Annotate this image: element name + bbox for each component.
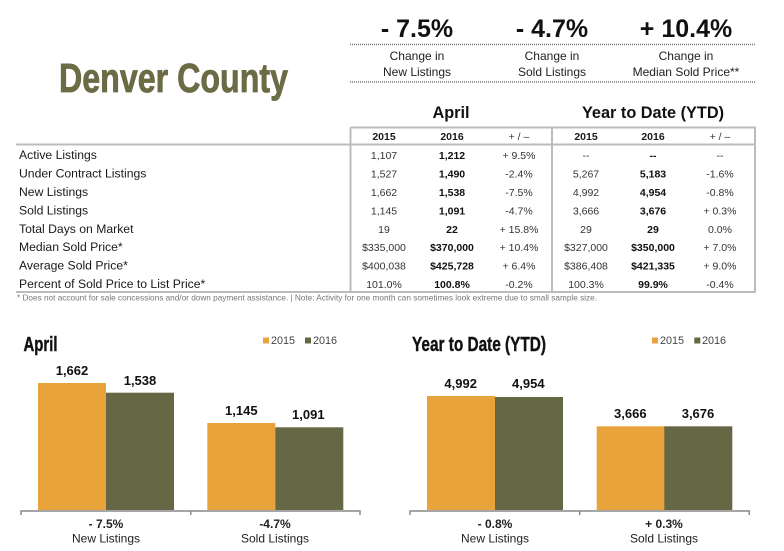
stat: median sold price change: Median Sold Price**	[633, 65, 740, 79]
row: New Listings: 1,662	[371, 187, 397, 199]
category label: Sold Listings	[630, 517, 698, 546]
category label: Sold Listings: Sold Listings	[241, 532, 309, 546]
category label: Sold Listings	[241, 517, 309, 546]
legend: 2016	[702, 335, 726, 347]
category label: New Listings: - 7.5%	[89, 517, 124, 531]
bars: New Listings	[427, 376, 563, 510]
legend	[263, 335, 337, 347]
row: Median Sold Price: Median Sold Price*	[19, 240, 123, 254]
heading: Year to Date table section: Year to Date (YTD)	[582, 104, 724, 122]
row: Under Contract Listings	[19, 166, 734, 180]
row: Median Sold Price: $370,000	[430, 242, 474, 254]
row: Average Sold Price: $386,408	[564, 260, 608, 272]
row: Total Days on Market: 22	[446, 224, 458, 236]
category label: Sold Listings: + 0.3%	[645, 517, 683, 531]
row: Active Listings: 1,212	[439, 150, 465, 162]
row: Total Days on Market	[19, 222, 732, 236]
row: New Listings	[19, 185, 734, 199]
stat: new listings change: Change in	[390, 49, 444, 63]
row: New Listings: 1,538	[439, 187, 465, 199]
bars: New Listings: 1,538	[124, 373, 156, 388]
row: Percent of Sold Price to List Price	[19, 277, 734, 291]
row: Average Sold Price: $400,038	[362, 260, 406, 272]
row: Total Days on Market: + 15.8%	[500, 224, 538, 236]
title: Denver County	[59, 55, 288, 101]
table header years: 2015	[372, 131, 396, 143]
panel: April bar chart	[21, 334, 360, 546]
row: Active Listings: Active Listings	[19, 148, 97, 162]
row: Sold Listings: 3,666	[573, 206, 599, 218]
row: Active Listings: --	[582, 150, 590, 162]
row: New Listings: -7.5%	[505, 187, 533, 199]
bars: New Listings	[38, 363, 174, 510]
row: Total Days on Market: 19	[378, 224, 390, 236]
row: Median Sold Price: $350,000	[631, 242, 675, 254]
row: Total Days on Market: 0.0%	[708, 224, 732, 236]
row: Total Days on Market: Total Days on Market	[19, 222, 134, 236]
row: Median Sold Price	[19, 240, 736, 254]
legend: 2015	[660, 335, 684, 347]
row: Average Sold Price: Average Sold Price*	[19, 258, 128, 272]
summary: key changes	[350, 15, 755, 82]
row: Active Listings: 1,107	[371, 150, 397, 162]
bars: Sold Listings: 3,666	[614, 406, 647, 421]
row: Sold Listings	[19, 204, 736, 218]
table header years: + / –	[509, 131, 530, 143]
row: Percent of Sold Price to List Price: -0.4%	[706, 279, 734, 291]
bars: New Listings: 4,992	[444, 376, 477, 391]
stat: new listings change: New Listings	[383, 65, 451, 79]
table header years: 2015	[574, 131, 598, 143]
row: Sold Listings: 1,091	[439, 206, 465, 218]
row: Sold Listings: Sold Listings	[19, 204, 88, 218]
legend	[652, 335, 726, 347]
bars: Sold Listings	[207, 403, 343, 510]
row: Percent of Sold Price to List Price: 100.3%	[568, 279, 604, 291]
panel: Year to Date bar chart	[410, 334, 749, 546]
row: Under Contract Listings: 5,183	[640, 168, 666, 180]
bars: Sold Listings: 1,145	[225, 403, 258, 418]
row: Sold Listings: -4.7%	[505, 206, 533, 218]
row: Median Sold Price: $327,000	[564, 242, 608, 254]
row: Percent of Sold Price to List Price: 99.9%	[638, 279, 669, 291]
row: Under Contract Listings: Under Contract Listings	[19, 166, 146, 180]
row: New Listings: 4,992	[573, 187, 599, 199]
stat: new listings change: - 7.5%	[381, 15, 453, 43]
bars: Sold Listings: 3,676	[682, 406, 714, 421]
bars: Sold Listings: 1,091	[292, 407, 325, 422]
row: Average Sold Price: $425,728	[430, 260, 474, 272]
row: Sold Listings: 3,676	[640, 206, 666, 218]
row: New Listings: -0.8%	[706, 187, 734, 199]
footnote: * Does not account for sale concessions and/or down payment assistance. | Note: Activity for one month can sometimes look extreme due to small sample size.	[17, 293, 597, 303]
bars: New Listings: 4,954	[512, 376, 545, 391]
category label: Sold Listings: Sold Listings	[630, 532, 698, 546]
row: Under Contract Listings: 5,267	[573, 168, 599, 180]
row: Percent of Sold Price to List Price: -0.2%	[505, 279, 533, 291]
row: Average Sold Price: $421,335	[631, 260, 675, 272]
row: Active Listings: + 9.5%	[503, 150, 535, 162]
legend: 2015	[271, 335, 295, 347]
row: Median Sold Price: + 10.4%	[500, 242, 538, 254]
row: Percent of Sold Price to List Price: Percent of Sold Price to List Price*	[19, 277, 206, 291]
row: Average Sold Price: + 9.0%	[704, 260, 736, 272]
row: Active Listings: --	[650, 150, 657, 162]
heading: April table section: April	[432, 104, 470, 122]
table header years: 2016	[440, 131, 464, 143]
row: Sold Listings: 1,145	[371, 206, 397, 218]
category label: New Listings	[461, 517, 529, 546]
table header years: 2016	[641, 131, 665, 143]
row: Percent of Sold Price to List Price: 101.0%	[366, 279, 402, 291]
stat: median sold price change	[633, 15, 740, 79]
row: Average Sold Price	[19, 258, 736, 272]
row: Percent of Sold Price to List Price: 100.8%	[434, 279, 470, 291]
stat: sold listings change: Sold Listings	[518, 65, 586, 79]
row: Median Sold Price: + 7.0%	[704, 242, 736, 254]
row: Total Days on Market: 29	[647, 224, 659, 236]
row: Under Contract Listings: 1,490	[439, 168, 465, 180]
bars: New Listings: 1,662	[56, 363, 88, 378]
row: New Listings: 4,954	[640, 187, 666, 199]
chart title: April: April	[24, 334, 58, 356]
legend: 2016	[313, 335, 337, 347]
row: Median Sold Price: $335,000	[362, 242, 406, 254]
table header years	[372, 131, 731, 143]
row: Active Listings	[19, 148, 724, 162]
stat: median sold price change: + 10.4%	[640, 15, 732, 43]
category label: New Listings	[72, 517, 140, 546]
table header years: + / –	[710, 131, 731, 143]
row: Total Days on Market: 29	[580, 224, 592, 236]
category label: Sold Listings: -4.7%	[259, 517, 291, 531]
bars: Sold Listings	[597, 406, 732, 510]
row: Under Contract Listings: 1,527	[371, 168, 397, 180]
stat: new listings change	[381, 15, 453, 79]
category label: New Listings: New Listings	[461, 532, 529, 546]
stat: sold listings change	[516, 15, 588, 79]
row: Average Sold Price: + 6.4%	[503, 260, 535, 272]
data table	[16, 128, 755, 292]
category label: New Listings: - 0.8%	[478, 517, 513, 531]
row: New Listings: New Listings	[19, 185, 88, 199]
stat: sold listings change: - 4.7%	[516, 15, 588, 43]
stat: median sold price change: Change in	[659, 49, 713, 63]
stat: sold listings change: Change in	[525, 49, 579, 63]
category label: New Listings: New Listings	[72, 532, 140, 546]
row: Under Contract Listings: -2.4%	[505, 168, 533, 180]
row: Sold Listings: + 0.3%	[704, 206, 736, 218]
chart title: Year to Date: Year to Date (YTD)	[412, 334, 546, 356]
row: Active Listings: --	[716, 150, 724, 162]
row: Under Contract Listings: -1.6%	[706, 168, 734, 180]
